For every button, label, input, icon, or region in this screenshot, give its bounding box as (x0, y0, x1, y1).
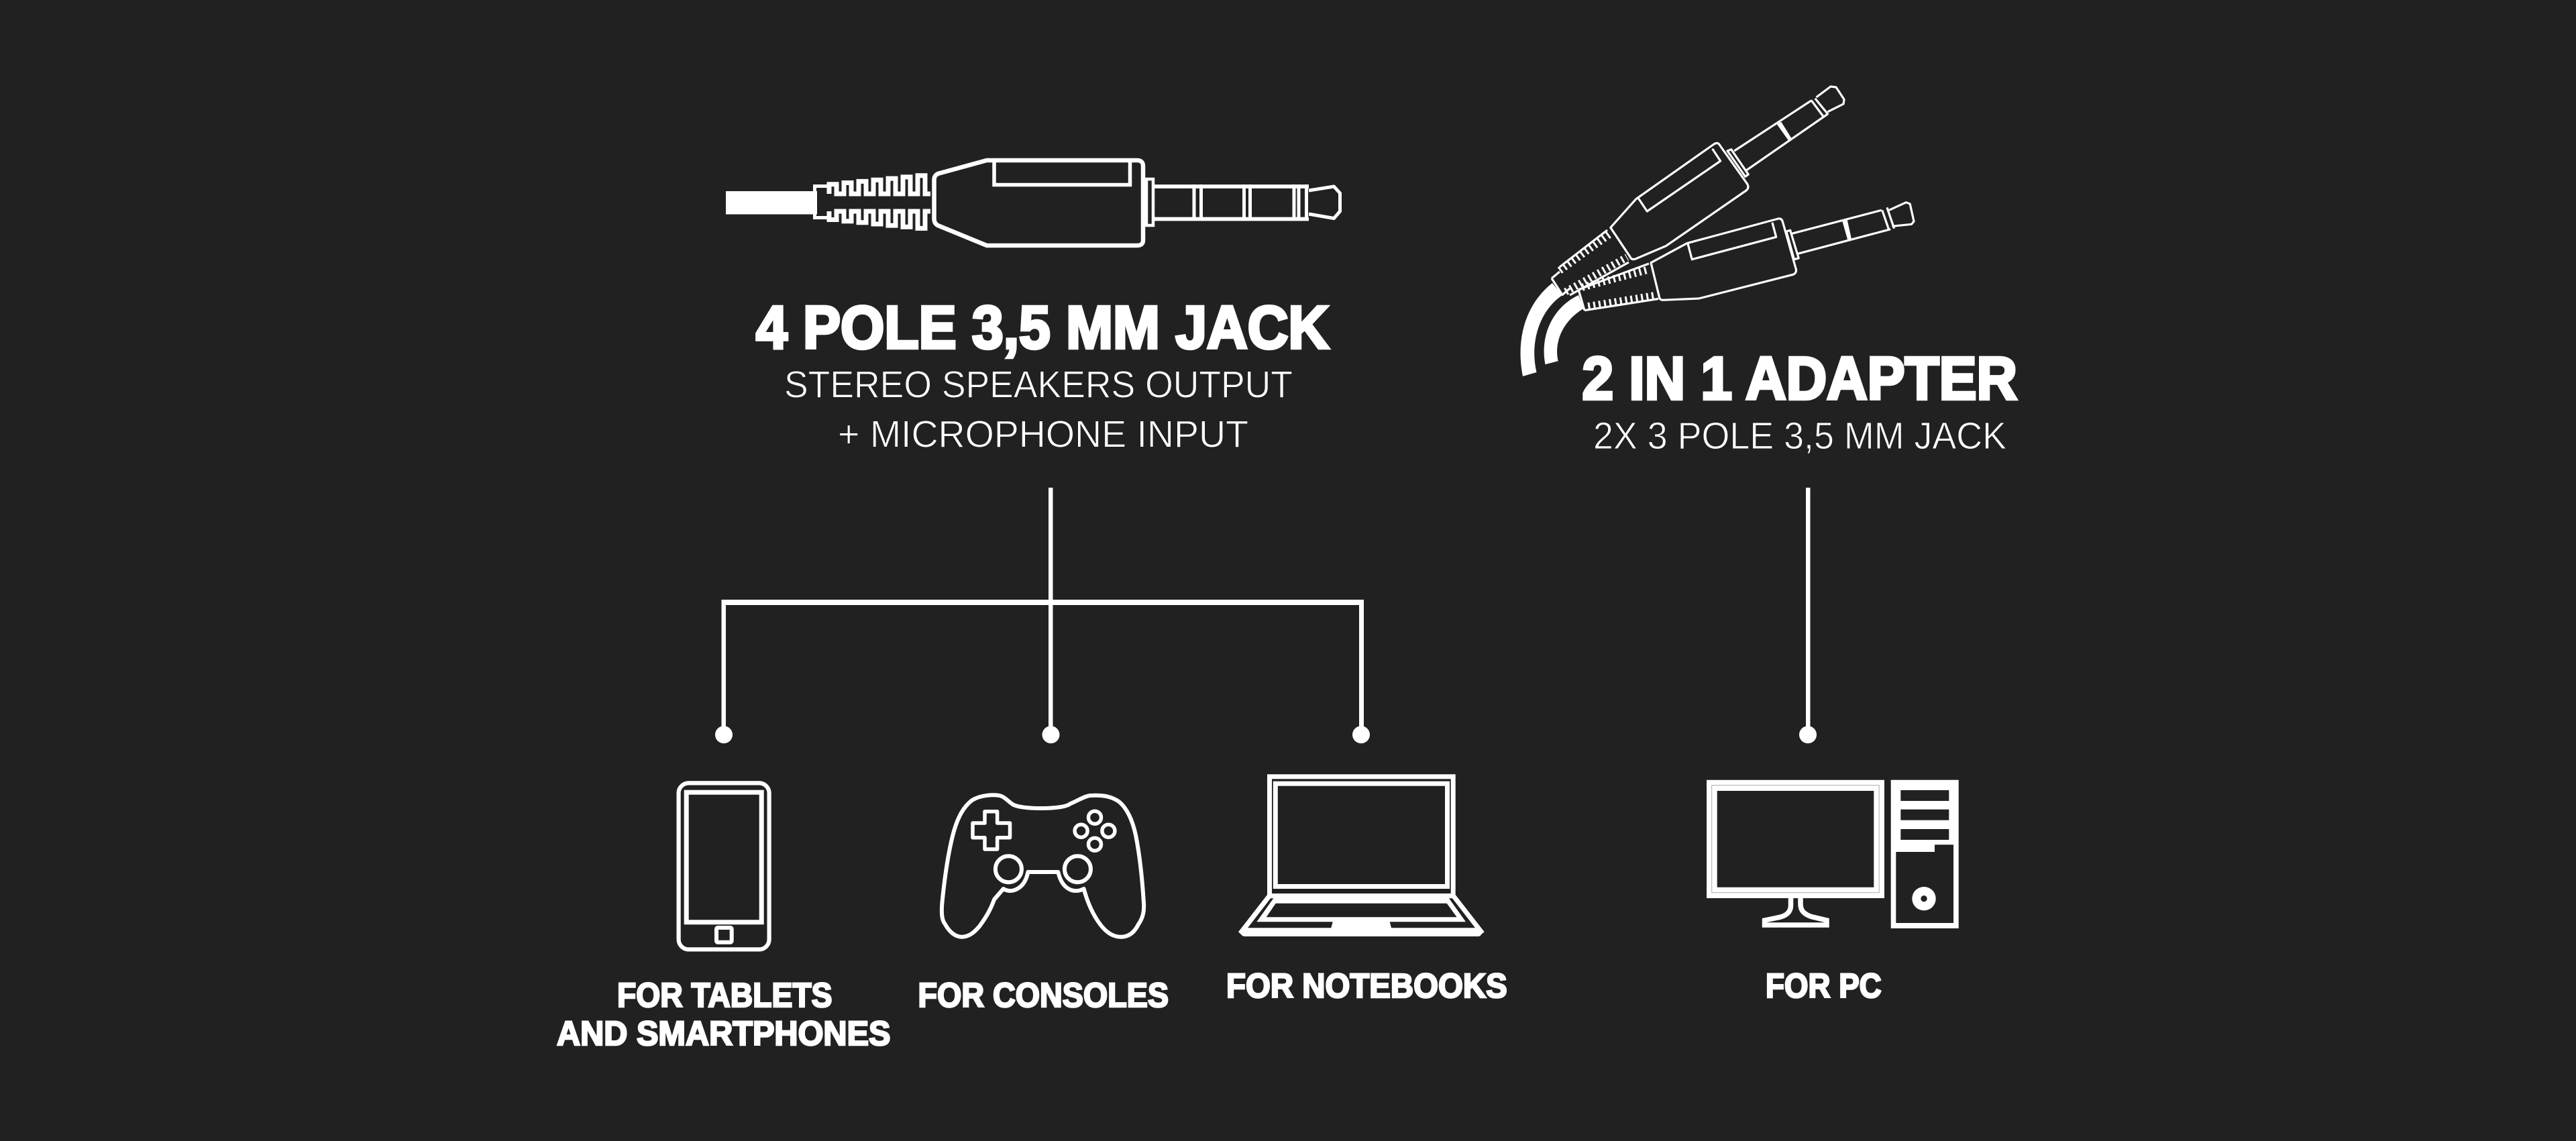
icon: laptop (1238, 777, 1485, 936)
label: for pc: FOR PC (1766, 967, 1882, 1005)
icon: 4 pole jack plug (726, 160, 1340, 246)
subheading: 2x 3 pole 3,5 mm jack: 2X 3 POLE 3,5 MM JACK (1593, 415, 2006, 457)
heading: 4 pole 3,5 mm jack: 4 POLE 3,5 MM JACK (756, 294, 1329, 362)
icon: game controller (942, 795, 1144, 937)
label: for tablets: FOR TABLETS (617, 976, 832, 1014)
panel: notebooks (1226, 777, 1507, 1005)
lower plug (1544, 203, 1914, 364)
icon: 2 in 1 adapter plugs (1521, 87, 1914, 376)
panel: 4 pole jack header (726, 160, 1340, 456)
panel: 2 in 1 adapter header (1521, 87, 2017, 457)
panel: consoles (918, 795, 1169, 1014)
icon: smartphone (679, 783, 769, 949)
panel: pc (1707, 780, 1959, 1005)
panel: tablets and smartphones (557, 783, 891, 1052)
connector line: adapter to pc (1799, 488, 1817, 743)
icon: desktop computer (1707, 780, 1959, 928)
label: for notebooks: FOR NOTEBOOKS (1226, 967, 1507, 1005)
subheading: microphone input: + MICROPHONE INPUT (838, 413, 1248, 456)
label: and smartphones: AND SMARTPHONES (557, 1014, 891, 1052)
connector tree: jack to devices (715, 488, 1370, 743)
label: for consoles: FOR CONSOLES (918, 976, 1169, 1014)
subheading: stereo speakers output: STEREO SPEAKERS OUTPUT (784, 364, 1293, 406)
heading: 2 in 1 adapter: 2 IN 1 ADAPTER (1582, 345, 2017, 413)
upper plug (1521, 87, 1844, 376)
